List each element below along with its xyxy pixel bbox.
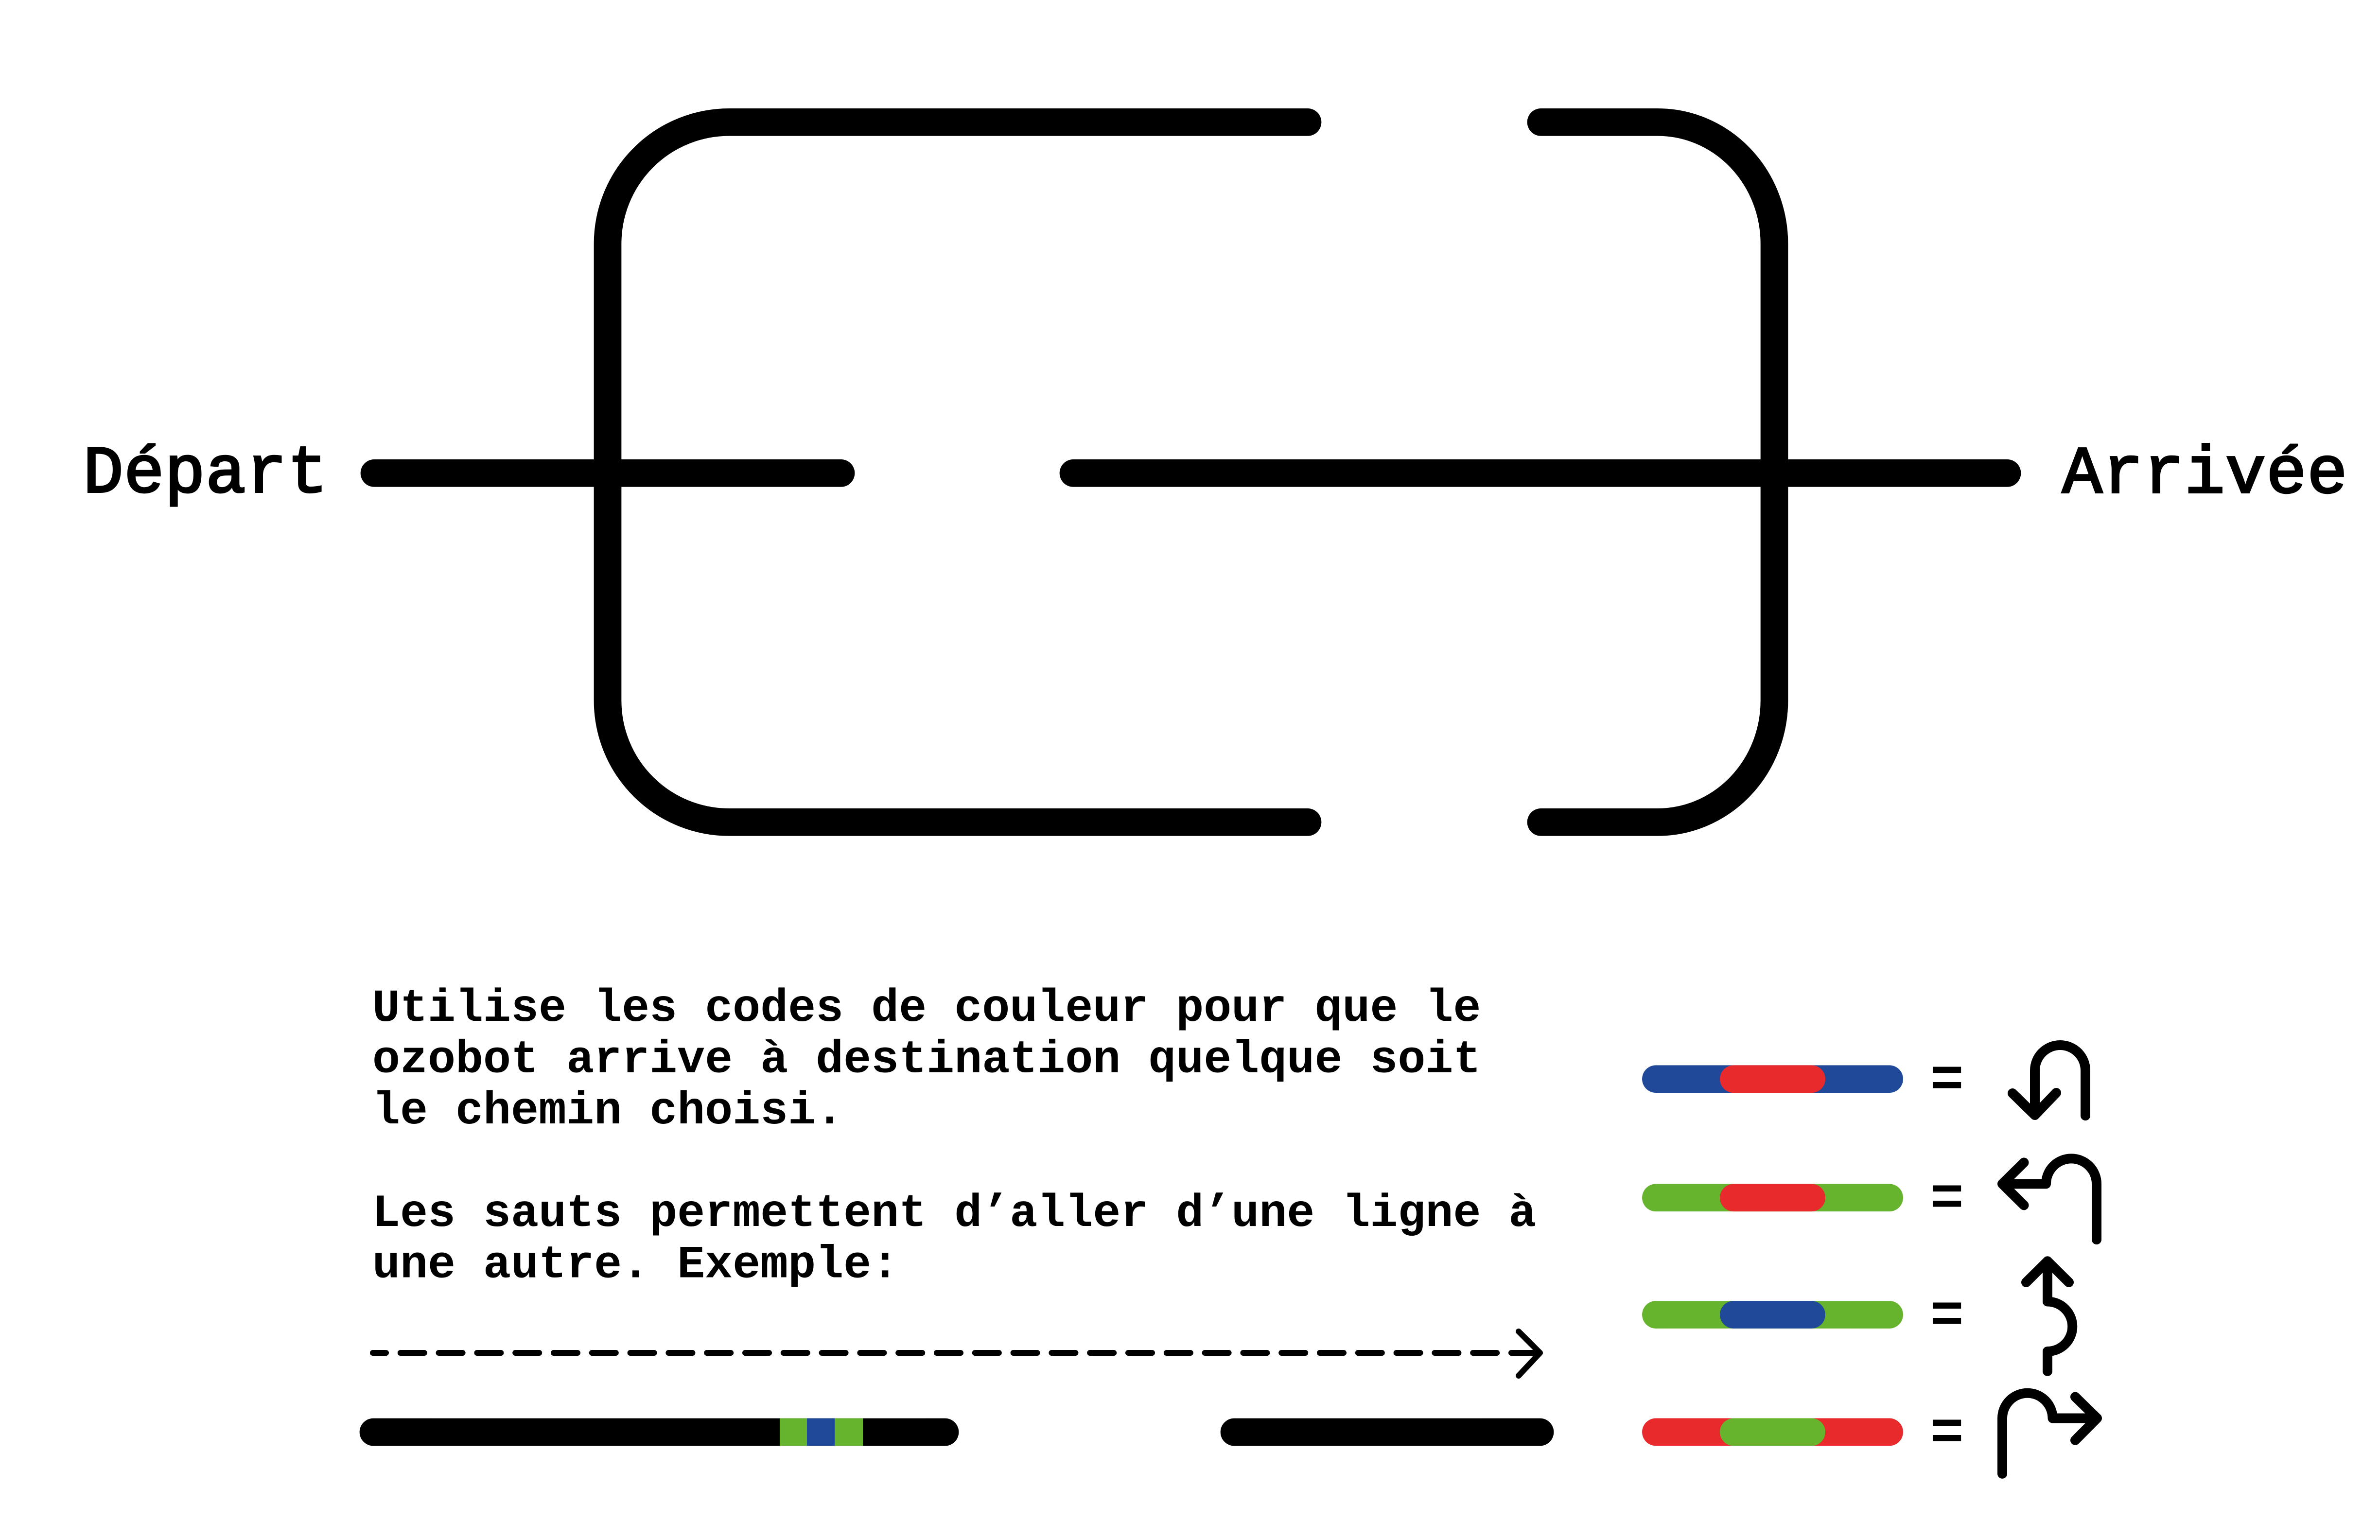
instructions text: Utilise les codes de couleur pour que le xyxy=(372,982,1481,1035)
instructions text: le chemin choisi. xyxy=(372,1085,843,1138)
equals sign: = xyxy=(1930,1402,1964,1466)
colour code bar xyxy=(1656,1184,1890,1211)
dashed arrow xyxy=(373,1331,1540,1376)
path: right bracket xyxy=(1541,122,1774,822)
instructions text: Les sauts permettent d’aller d’une ligne à xyxy=(372,1188,1536,1240)
instructions text: ozobot arrive à destination quelque soit xyxy=(372,1033,1481,1086)
equals sign: = xyxy=(1930,1285,1964,1349)
example jump line xyxy=(373,1418,1540,1446)
icon: jump straight arrow xyxy=(2026,1261,2072,1371)
icon: right turn arrow xyxy=(2002,1393,2097,1474)
code row: green blue green, straight xyxy=(1656,1261,2072,1371)
instructions text xyxy=(372,982,1536,1291)
path: start line xyxy=(374,459,841,487)
label: Arrivée: Arrivée xyxy=(2062,437,2348,513)
label: Départ: Départ xyxy=(83,437,328,512)
path: left bracket xyxy=(608,122,1308,822)
colour code bar xyxy=(1656,1301,1890,1329)
maze diagram: track lines xyxy=(374,122,2007,822)
colour code bar xyxy=(1656,1065,1890,1093)
instructions text: une autre. Exemple: xyxy=(372,1239,899,1291)
equals sign: = xyxy=(1930,1049,1964,1113)
code row: blue red blue, U-turn xyxy=(1656,1045,2085,1116)
icon: U-turn arrow xyxy=(2012,1045,2085,1116)
equals sign: = xyxy=(1930,1168,1964,1232)
code row: red green red, turn right xyxy=(1656,1393,2097,1474)
icon: left turn arrow xyxy=(2002,1158,2097,1240)
code row: green red green, turn left xyxy=(1656,1158,2097,1240)
path: finish line xyxy=(1073,459,2007,487)
colour code bar xyxy=(1656,1418,1890,1446)
